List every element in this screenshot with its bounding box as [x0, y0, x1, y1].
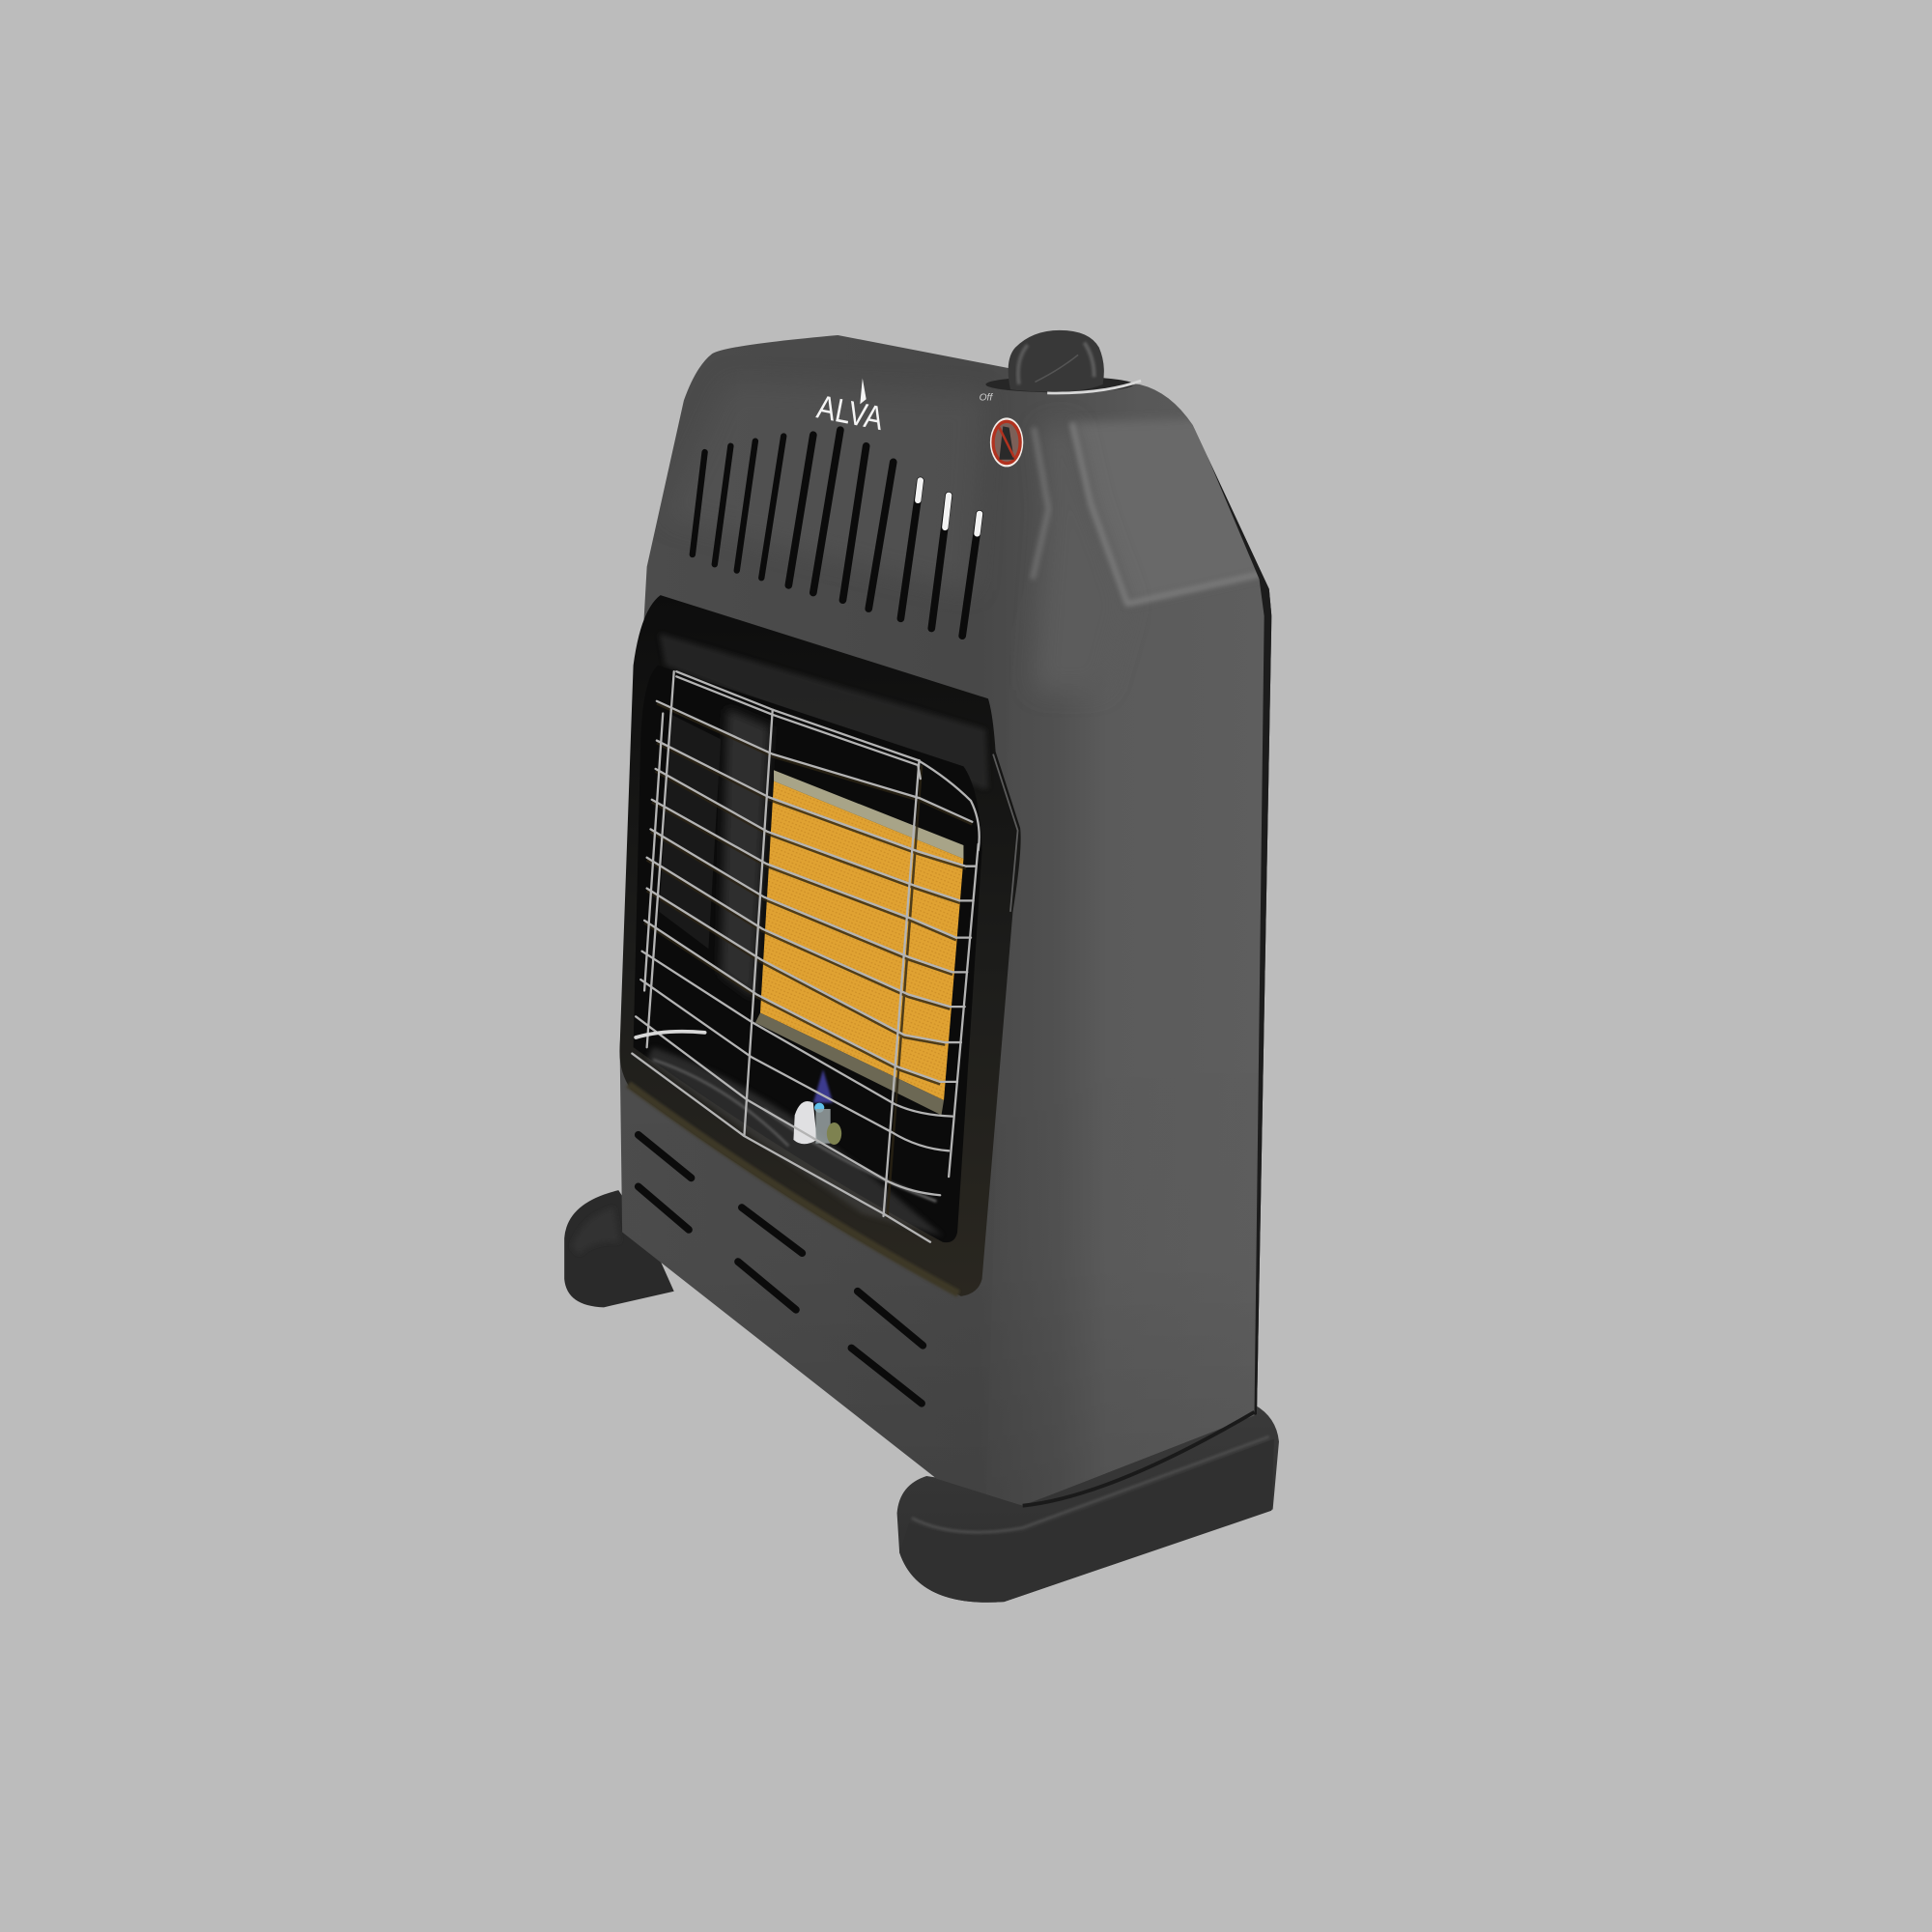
frame gloss band	[659, 634, 988, 788]
warning sticker	[990, 417, 1023, 467]
upper bevel plane	[1076, 419, 1258, 599]
bevel highlights	[1072, 423, 1265, 604]
right foot base	[897, 1405, 1279, 1603]
bottom vent slots	[639, 1135, 923, 1404]
logo: ALVA	[814, 379, 886, 438]
igniter and pilot flame	[793, 1069, 841, 1145]
burner lower edge	[755, 1012, 944, 1115]
chrome safety grill	[632, 671, 980, 1242]
yellow ceramic burner	[760, 781, 963, 1100]
dark rear edge	[1208, 456, 1271, 1416]
front window frame	[619, 595, 1021, 1296]
lower body fade	[616, 863, 1282, 1516]
bevel transition	[1041, 434, 1082, 682]
logo: ALVA: ALVA	[814, 389, 886, 438]
chrome safety grill shadow	[644, 703, 972, 1218]
knob label: Off	[980, 393, 993, 404]
left foot	[564, 1190, 674, 1307]
heater body shell	[616, 335, 1282, 1516]
product illustration: ALVA gas heater	[564, 330, 1279, 1603]
bottom glass reflections	[653, 1060, 936, 1202]
inner left reflection	[721, 708, 770, 998]
vent highlights	[918, 480, 980, 533]
top vent slots	[693, 430, 980, 636]
base collar line	[1023, 1412, 1254, 1506]
glass opening	[634, 666, 982, 1242]
side panel shading	[1076, 576, 1271, 1486]
control knob	[985, 330, 1141, 393]
front top highlight	[666, 382, 985, 591]
burner surround top	[774, 770, 963, 859]
